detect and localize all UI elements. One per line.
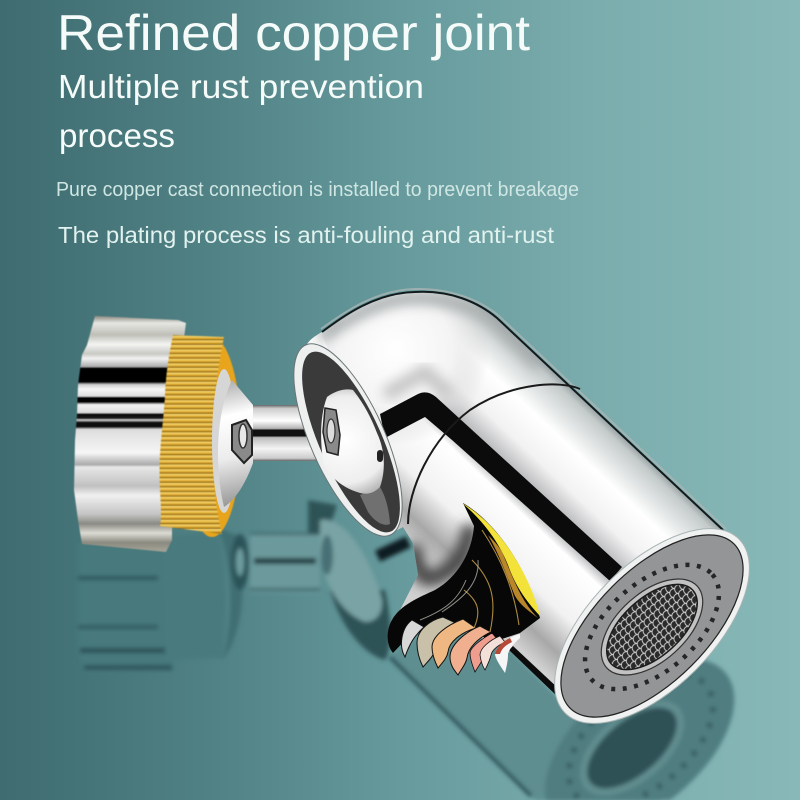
mesh ring <box>584 561 720 693</box>
fish-scale mesh <box>592 569 712 685</box>
upper edge line <box>322 292 723 530</box>
light streaks <box>420 560 478 620</box>
feature line: plating: The plating process is anti-fouling and anti-rust <box>58 222 554 248</box>
white strip finger <box>401 620 424 657</box>
lower body stripe <box>509 646 560 697</box>
ball reflection <box>330 590 390 660</box>
collar seam line <box>408 384 580 524</box>
knurl reflection <box>163 530 226 660</box>
cream finger <box>417 617 458 667</box>
faucet elbow body <box>307 288 726 684</box>
amber band <box>488 535 538 618</box>
salmon finger <box>450 626 491 675</box>
red accent <box>495 638 512 654</box>
peach finger <box>432 619 476 668</box>
reflection of nut and stem on surface <box>78 500 411 672</box>
pink finger <box>470 633 498 672</box>
elbow shading <box>385 372 450 395</box>
water stream mirror reflection <box>388 503 540 675</box>
nozzle mouth with ball joint <box>272 330 424 550</box>
dome highlight <box>324 308 481 434</box>
yellow highlight <box>462 503 540 616</box>
connecting stem <box>253 405 325 461</box>
white finger <box>495 634 520 673</box>
subtitle line two: process <box>59 117 175 154</box>
subtitle line one: Multiple rust prevention <box>58 68 424 105</box>
pale finger <box>480 636 505 670</box>
feature line: copper connection: Pure copper cast connection is installed to prevent breakage <box>56 178 579 201</box>
dome edge shading <box>320 298 540 366</box>
hex reflection <box>231 534 249 590</box>
brass knurled ring <box>160 335 241 537</box>
stem reflection <box>250 533 320 593</box>
outlet dot ring <box>563 541 741 713</box>
reflection stripe on body <box>380 392 622 581</box>
reflection of barrel and spray face <box>390 625 734 800</box>
shading near stream <box>413 525 470 578</box>
title: Refined copper joint <box>57 5 530 61</box>
left ball joint <box>212 369 253 513</box>
nut reflection <box>78 543 173 672</box>
aerator end face <box>521 495 783 757</box>
silver knurled nut <box>74 316 186 552</box>
amber streaks <box>464 530 519 632</box>
outer soft edge <box>321 289 726 529</box>
